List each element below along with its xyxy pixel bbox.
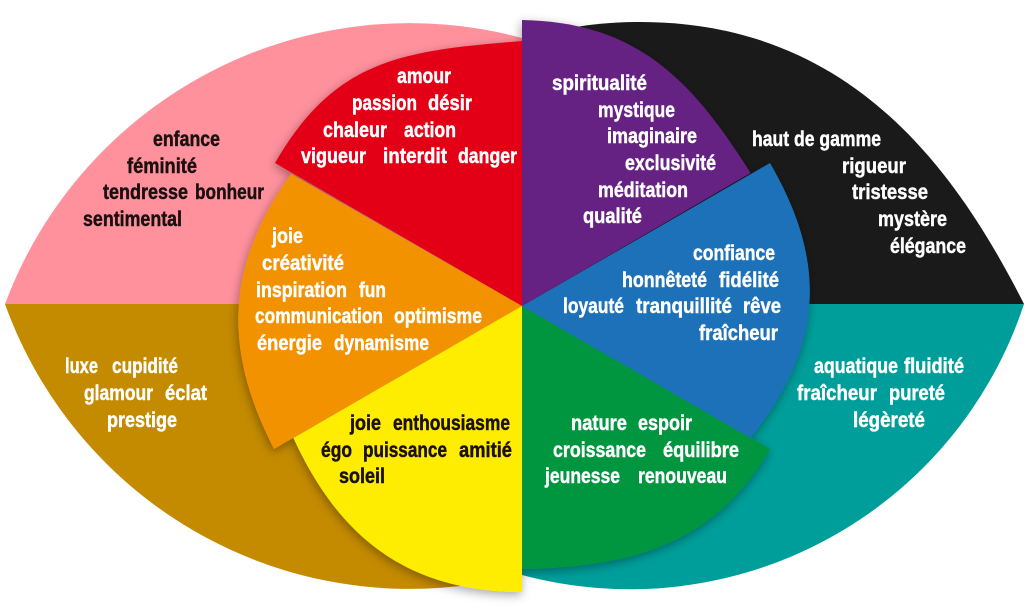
wedge: purple — [522, 20, 750, 306]
text: red words: amour — [397, 65, 451, 88]
text: orange words — [255, 225, 482, 355]
text: gold words — [65, 355, 207, 432]
wedge: red — [275, 41, 522, 306]
quadrant: teal — [522, 304, 1024, 589]
quadrant: gold — [5, 304, 522, 589]
text: red words: danger — [458, 145, 517, 168]
text: yellow words: amitié — [459, 439, 512, 462]
wedge: blue — [522, 163, 810, 438]
text: blue words: rêve — [743, 295, 781, 318]
text: yellow words: joie — [349, 412, 381, 435]
text: blue words: confiance — [693, 242, 775, 265]
text: pink words: féminité — [127, 155, 197, 178]
text: teal words: pureté — [889, 382, 945, 405]
text: blue words: loyauté — [563, 295, 624, 318]
text: teal words: légèreté — [853, 409, 925, 432]
text: teal words: aquatique — [814, 355, 898, 378]
text: green words: croissance — [553, 439, 646, 462]
text: purple words: qualité — [583, 205, 642, 228]
text: red words: interdit — [383, 145, 447, 168]
text: black words: tristesse — [852, 181, 928, 204]
text: red words: passion — [352, 92, 417, 115]
text: orange words: communication — [255, 305, 383, 328]
wedge: yellow — [293, 306, 522, 592]
text: pink words: enfance — [153, 128, 220, 151]
text: yellow words — [321, 412, 512, 488]
text: orange words: créativité — [262, 252, 344, 275]
text: green words: nature — [571, 412, 627, 435]
text: yellow words: enthousiasme — [393, 412, 510, 435]
text: yellow words: puissance — [363, 439, 447, 462]
wedge: green — [522, 306, 770, 569]
text: pink words: tendresse — [103, 181, 188, 204]
text: blue words: fidélité — [719, 269, 779, 292]
text: blue words — [563, 242, 781, 345]
text: pink words: bonheur — [195, 181, 264, 204]
text: gold words: luxe — [65, 355, 98, 378]
text: orange words: optimisme — [394, 305, 482, 328]
text: black words: haut de gamme — [752, 128, 881, 151]
text: teal words — [797, 355, 964, 432]
text: green words: jeunesse — [544, 465, 620, 488]
quadrant: pink — [5, 23, 522, 304]
text: gold words: éclat — [165, 382, 207, 405]
text: orange words: énergie — [257, 332, 322, 355]
text: green words: renouveau — [638, 465, 727, 488]
text: gold words: prestige — [107, 409, 177, 432]
text: yellow words: soleil — [339, 465, 385, 488]
text: red words — [301, 65, 517, 168]
text: black words: élégance — [890, 235, 966, 258]
text: yellow words: égo — [321, 439, 352, 462]
text: red words: chaleur — [323, 119, 387, 142]
text: blue words: tranquillité — [636, 295, 732, 318]
text: green words: espoir — [638, 412, 692, 435]
wedge: orange — [238, 174, 522, 449]
text: purple words: exclusivité — [625, 152, 716, 175]
text: purple words: imaginaire — [607, 125, 697, 148]
text: red words: action — [404, 119, 456, 142]
text: blue words: fraîcheur — [699, 322, 778, 345]
text: orange words: joie — [271, 225, 303, 248]
text: black words: mystère — [878, 208, 947, 231]
text: purple words: méditation — [598, 179, 688, 202]
text: pink words — [83, 128, 264, 231]
text: green words — [544, 412, 739, 488]
text: green words: équilibre — [663, 439, 739, 462]
text: red words: désir — [428, 92, 472, 115]
text: orange words: inspiration — [256, 279, 347, 302]
text: orange words: dynamisme — [334, 332, 429, 355]
text: black words — [752, 128, 966, 258]
text: purple words: mystique — [598, 99, 675, 122]
text: pink words: sentimental — [83, 208, 182, 231]
text: red words: vigueur — [301, 145, 366, 168]
text: purple words: spiritualité — [552, 72, 647, 95]
quadrant: black — [522, 22, 1024, 304]
text: gold words: glamour — [84, 382, 153, 405]
text: teal words: fraîcheur — [797, 382, 877, 405]
text: gold words: cupidité — [112, 355, 178, 378]
colour wheel — [238, 20, 810, 592]
text: orange words: fun — [359, 279, 386, 302]
text: purple words — [552, 72, 716, 228]
text: black words: rigueur — [842, 155, 906, 178]
text: blue words: honnêteté — [622, 269, 707, 292]
text: teal words: fluidité — [904, 355, 964, 378]
